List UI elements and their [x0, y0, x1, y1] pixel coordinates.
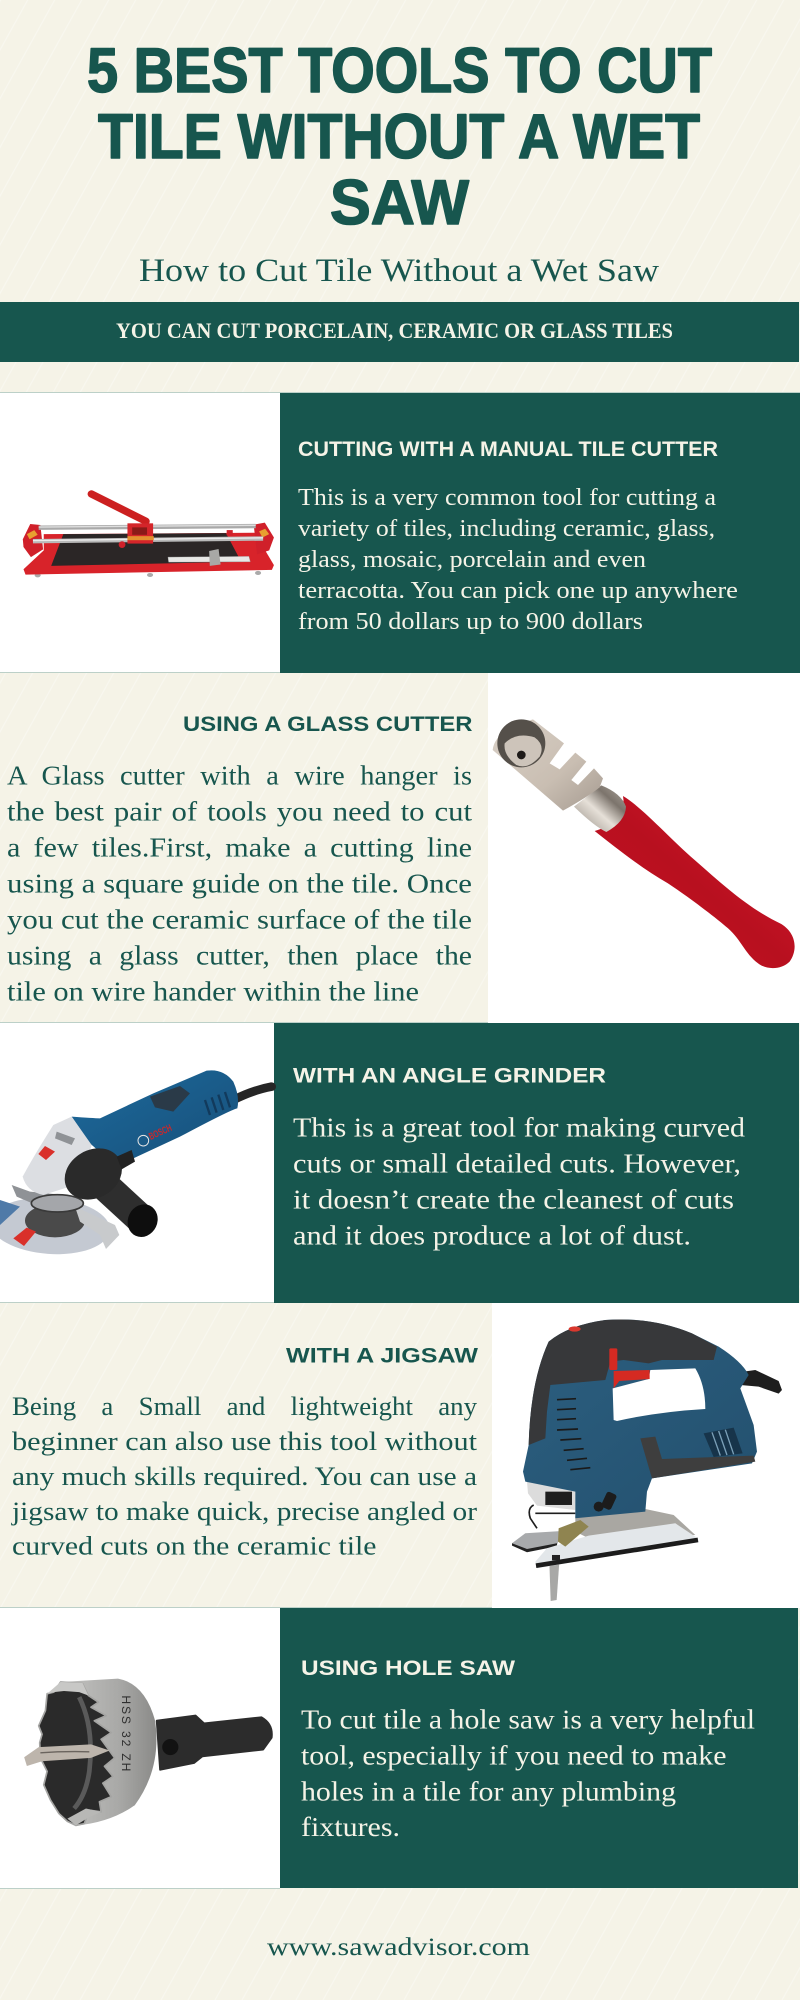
text block — [301, 1704, 755, 1842]
panel: manual tile cutter — [0, 392, 800, 673]
icon: hole saw — [24, 1679, 272, 1825]
text block: and it does produce a lot of dust. — [293, 1220, 691, 1250]
panel: jigsaw — [0, 1303, 800, 1608]
banner: YOU CAN CUT PORCELAIN, CERAMIC OR GLASS TILES — [116, 318, 673, 343]
text block: This is a great tool for making curved — [293, 1112, 746, 1142]
banner — [0, 302, 799, 362]
text block: fixtures. — [301, 1812, 400, 1842]
text block — [298, 484, 738, 635]
text block: any much skills required. You can use a — [12, 1462, 478, 1491]
text block: curved cuts on the ceramic tile — [12, 1532, 376, 1560]
text block: jigsaw to make quick, precise angled or — [11, 1497, 477, 1526]
text block: This is a very common tool for cutting a — [298, 484, 716, 511]
text block — [293, 1112, 746, 1250]
text block: Being a Small and lightweight any — [12, 1392, 477, 1421]
text block: it doesn’t create the cleanest of cuts — [293, 1184, 734, 1214]
text block: variety of tiles, including ceramic, glass, — [298, 515, 715, 542]
text block — [11, 1392, 478, 1560]
text block: beginner can also use this tool without — [12, 1427, 478, 1456]
text block: the best pair of tools you need to cut — [7, 796, 473, 826]
footer website: www.sawadvisor.com — [267, 1932, 530, 1961]
panel: glass cutter — [0, 673, 800, 1023]
panel: angle grinder — [0, 1023, 799, 1303]
subtitle: How to Cut Tile Without a Wet Saw — [139, 253, 659, 289]
text block: cuts or small detailed cuts. However, — [293, 1148, 741, 1178]
text block: holes in a tile for any plumbing — [301, 1776, 676, 1806]
icon: angle grinder: BOSCH — [147, 1123, 174, 1143]
text block: using a glass cutter, then place the — [7, 940, 472, 970]
text block — [7, 760, 473, 1006]
title: SAW — [330, 168, 470, 238]
icon: jigsaw — [512, 1319, 782, 1601]
icon: glass cutter — [493, 719, 795, 968]
heading: USING HOLE SAW — [301, 1656, 516, 1680]
text block: A Glass cutter with a wire hanger is — [7, 760, 472, 790]
text block: using a square guide on the tile. Once — [7, 868, 472, 898]
text block: tool, especially if you need to make — [301, 1740, 727, 1770]
icon: angle grinder — [0, 1070, 272, 1258]
text block: glass, mosaic, porcelain and even — [298, 546, 646, 573]
heading: USING A GLASS CUTTER — [183, 712, 473, 736]
text block: tile on wire hander within the line — [7, 976, 419, 1006]
heading: WITH AN ANGLE GRINDER — [293, 1064, 607, 1088]
title: TILE WITHOUT A WET — [98, 102, 700, 172]
icon: manual tile cutter — [23, 494, 274, 577]
heading: WITH A JIGSAW — [286, 1344, 479, 1368]
text block: you cut the ceramic surface of the tile — [7, 904, 472, 934]
heading: CUTTING WITH A MANUAL TILE CUTTER — [298, 437, 718, 461]
title — [87, 36, 712, 238]
icon: hole saw: HSS 32 ZH — [119, 1695, 133, 1771]
text block: a few tiles.First, make a cutting line — [7, 832, 472, 862]
panel: hole saw — [0, 1608, 798, 1889]
text block: from 50 dollars up to 900 dollars — [298, 608, 643, 635]
text block: To cut tile a hole saw is a very helpful — [301, 1704, 755, 1734]
text block: terracotta. You can pick one up anywhere — [298, 577, 738, 604]
title: 5 BEST TOOLS TO CUT — [87, 36, 712, 106]
